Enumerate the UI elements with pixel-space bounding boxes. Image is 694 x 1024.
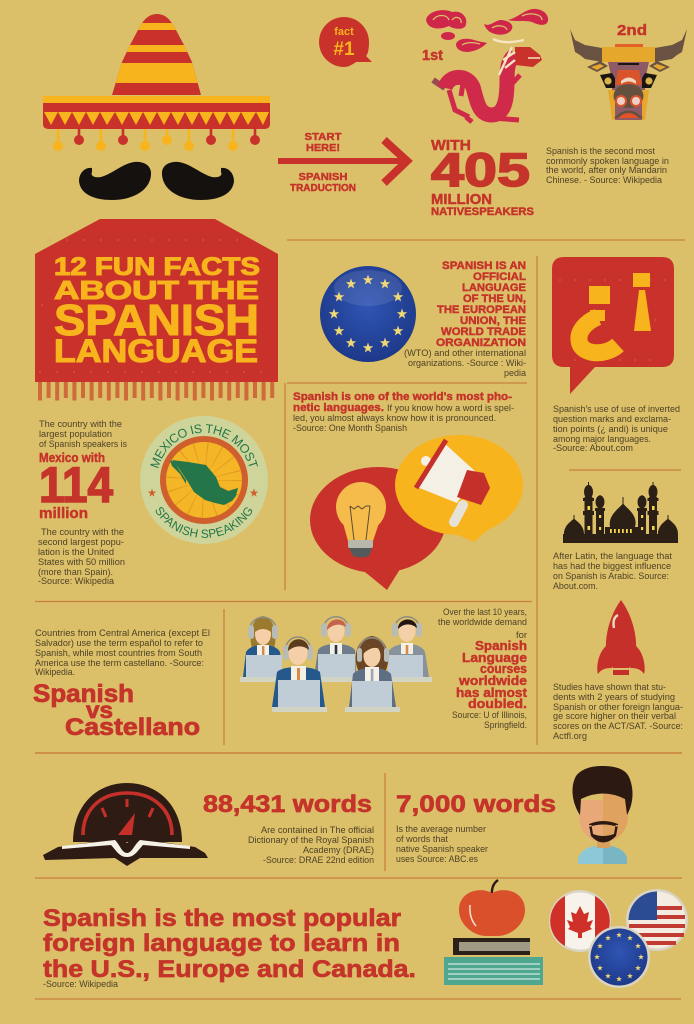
text: second most spoken: the world, after only Mandarin <box>546 165 667 176</box>
stat: 88,431 words: Dictionary of the Royal Spanish <box>248 835 374 846</box>
panel: title banner <box>35 219 278 399</box>
text: phonetic language <box>293 391 514 434</box>
title text <box>54 253 260 369</box>
stat: 88,431 words <box>203 791 374 866</box>
text: course demand: Language <box>462 650 527 665</box>
person: back right <box>378 617 432 682</box>
stat: 7,000 words <box>396 791 556 865</box>
text: start here: START <box>304 131 342 143</box>
text: course demand <box>438 607 528 731</box>
text: spanish vs castellano: Wikipedia. <box>35 667 75 678</box>
icon: inverted punctuation bubble <box>552 257 674 394</box>
text: start here: HERE! <box>306 142 340 154</box>
text: arabic influence <box>553 551 672 592</box>
icon: red bubble with light bulb <box>310 467 446 590</box>
icon: EU flag globe <box>320 266 416 362</box>
text: spanish vs castellano: Spanish <box>33 680 134 708</box>
text: second most spoken <box>546 146 669 186</box>
text: arabic influence: About.com. <box>553 581 598 592</box>
icon: mosque silhouette <box>563 482 678 543</box>
person: back centre <box>311 617 361 682</box>
text: official language: LANGUAGE <box>462 282 526 294</box>
text: phonetic language: led, you almost always know how it is pronounced. <box>293 413 496 424</box>
text: course demand: has almost <box>456 685 528 700</box>
text: spanish traduction: SPANISH <box>298 171 348 183</box>
text: mexico stat <box>38 419 127 587</box>
icon: sombrero <box>43 14 270 151</box>
icon: rocket <box>597 600 645 675</box>
text: official language: OF THE UN, <box>463 293 526 305</box>
icon: mexico seal <box>140 416 268 544</box>
icon: mustache <box>79 162 234 200</box>
text: phonetic language: netic languages. <box>293 402 384 414</box>
text: mexico stat: 114 <box>39 457 113 513</box>
text: course demand: worldwide <box>458 673 527 688</box>
stat: 7,000 words: Is the average number <box>396 824 487 835</box>
text: mexico stat: -Source: Wikipedia <box>38 576 115 587</box>
stat: 7,000 words: of words that <box>396 834 448 845</box>
text: mexico stat: (more than Spain). <box>38 567 113 578</box>
arrow <box>278 140 407 183</box>
stat: 88,431 words: Are contained in The official <box>261 825 374 836</box>
text: mexico stat: The country with the <box>41 527 124 538</box>
text: mexico stat: States with 50 million <box>38 557 125 568</box>
text: most popular foreign language: Spanish is the most popular <box>43 905 401 932</box>
stat: 405 million native speakers: MILLION <box>431 191 492 208</box>
icon: mexico seal: SPANISH SPEAKING <box>156 507 252 538</box>
text: mexico stat: lation is the United <box>38 547 114 558</box>
text: inverted marks: question marks and exclama- <box>553 414 671 425</box>
person: front left <box>272 637 327 712</box>
text: most popular foreign language: foreign language to learn in <box>43 930 400 957</box>
text: mexico stat: of Spanish speakers is <box>39 439 127 450</box>
icon: mexico seal: MEXICO IS THE MOST <box>150 424 258 468</box>
text: inverted marks: -Source: About.com <box>553 443 633 454</box>
text: spanish vs castellano <box>33 628 210 741</box>
title text: LANGUAGE <box>54 333 258 369</box>
text: course demand: Source: U of Illinois, <box>452 710 527 721</box>
text: official language: UNION, THE <box>460 315 526 327</box>
text: mexico stat: largest population <box>39 429 112 440</box>
text: test scores: scores on the ACT/SAT. -Source: <box>553 721 683 732</box>
stat: 7,000 words: uses Source: ABC.es <box>396 854 478 865</box>
text: official language: WORLD TRADE <box>441 326 526 338</box>
callout: fact #1 <box>319 17 372 67</box>
text: course demand: doubled. <box>468 696 527 711</box>
text: official language: SPANISH IS AN <box>442 260 526 272</box>
stat: 405 million native speakers: WITH <box>431 137 471 154</box>
title text: ABOUT THE <box>54 275 259 305</box>
text: start here <box>304 131 342 154</box>
text: test scores: dents with 2 years of studying <box>553 692 675 703</box>
text: most popular foreign language: -Source: Wikipedia <box>43 979 119 990</box>
text: phonetic language: Spanish is one of the world's most pho- <box>293 391 512 403</box>
stat: 7,000 words: native Spanish speaker <box>396 844 489 855</box>
person: back left <box>240 616 285 682</box>
text: phonetic language: If you know how a word is spel- <box>387 403 514 414</box>
icon: red dragon <box>426 9 548 122</box>
text: test scores: Spanish or other foreign langua- <box>553 702 683 713</box>
label: 1st: 1st <box>422 47 443 64</box>
person: front right <box>345 636 400 712</box>
text: test scores: Actfl.org <box>553 731 587 742</box>
text: official language: organizations. -Source : Wiki- <box>408 358 526 369</box>
text: test scores: ge score higher on their verbal <box>553 711 676 722</box>
text: official language <box>404 260 527 379</box>
text: inverted marks: among major languages. <box>553 434 651 445</box>
text: spanish vs castellano: Countries from Central America (except El <box>35 628 210 639</box>
text: mexico stat: Mexico with <box>39 450 105 465</box>
text: phonetic language: -Source: One Month Spanish <box>293 423 407 434</box>
text: arabic influence: has had the biggest influence <box>553 561 671 572</box>
flag: Canada <box>549 890 611 952</box>
text: spanish vs castellano: Salvador) use the term español to refer to <box>35 638 203 649</box>
icon: apple on books <box>444 880 543 985</box>
label: 2nd: 2nd <box>617 22 647 39</box>
stat: 405 million native speakers: 405 <box>431 143 530 196</box>
text: spanish vs castellano: Castellano <box>65 714 200 741</box>
icon: man with goatee <box>573 766 633 864</box>
text: second most spoken: Spanish is the second most <box>546 146 655 157</box>
text: course demand: Spanish <box>475 638 527 653</box>
callout: fact #1: fact <box>334 26 354 38</box>
icon: bull head <box>570 29 687 120</box>
text: course demand: Springfield. <box>484 720 527 731</box>
stat: 405 million native speakers: NATIVESPEAKERS <box>431 206 534 218</box>
text: test scores <box>553 682 683 742</box>
text: spanish vs castellano: vs <box>86 697 113 723</box>
text: course demand: courses <box>480 661 527 676</box>
text: official language: OFFICIAL <box>473 271 527 283</box>
flag: EU <box>588 926 650 988</box>
text: mexico stat: second largest popu- <box>38 537 124 548</box>
text: official language: ORGANIZATION <box>436 337 526 349</box>
text: most popular foreign language <box>43 905 416 990</box>
text: spanish vs castellano: Spanish, while most countries from South <box>35 648 202 659</box>
callout: fact #1: #1 <box>333 39 355 60</box>
text: second most spoken: Chinese. - Source: Wikipedia <box>546 175 663 186</box>
text: inverted marks: tion points (¿ andi) is unique <box>553 424 668 435</box>
text: test scores: Studies have shown that stu- <box>553 682 666 693</box>
text: spanish traduction: TRADUCTION <box>290 182 356 194</box>
text: official language: (WTO) and other international <box>404 348 526 359</box>
flag: USA <box>626 889 688 951</box>
text: course demand: Over the last 10 years, <box>443 607 527 618</box>
text: inverted marks <box>553 404 680 454</box>
text: second most spoken: commonly spoken language in <box>546 156 669 167</box>
title text: 12 FUN FACTS <box>54 253 260 281</box>
text: most popular foreign language: the U.S., Europe and Canada. <box>43 956 416 983</box>
text: official language: pedia <box>504 368 527 379</box>
text: inverted marks: Spanish's use of use of inverted <box>553 404 680 415</box>
text: mexico stat: The country with the <box>39 419 122 430</box>
stat: 88,431 words: -Source: DRAE 22nd edition <box>263 855 374 866</box>
title text: SPANISH <box>54 296 259 345</box>
text: official language: THE EUROPEAN <box>437 304 526 316</box>
text: course demand: for <box>516 630 528 641</box>
text: arabic influence: on Spanish is Arabic. Source: <box>553 571 669 582</box>
icon: book with gauge <box>43 783 208 866</box>
icon: yellow bubble with megaphone <box>395 435 523 542</box>
text: course demand: the worldwide demand <box>438 617 527 628</box>
stat: 88,431 words: Academy (DRAE) <box>303 845 374 856</box>
stat: 405 million native speakers <box>431 137 534 218</box>
text: spanish traduction <box>290 171 356 194</box>
stat: 88,431 words: 88,431 words <box>203 791 372 818</box>
text: arabic influence: After Latin, the language that <box>553 551 672 562</box>
illustration: people with headsets <box>240 616 432 712</box>
text: spanish vs castellano: America use the term castellano. -Source: <box>35 658 204 669</box>
icon: flags of Canada, USA and EU <box>549 889 688 988</box>
text: mexico stat: million <box>39 505 88 522</box>
stat: 7,000 words: 7,000 words <box>396 791 556 818</box>
